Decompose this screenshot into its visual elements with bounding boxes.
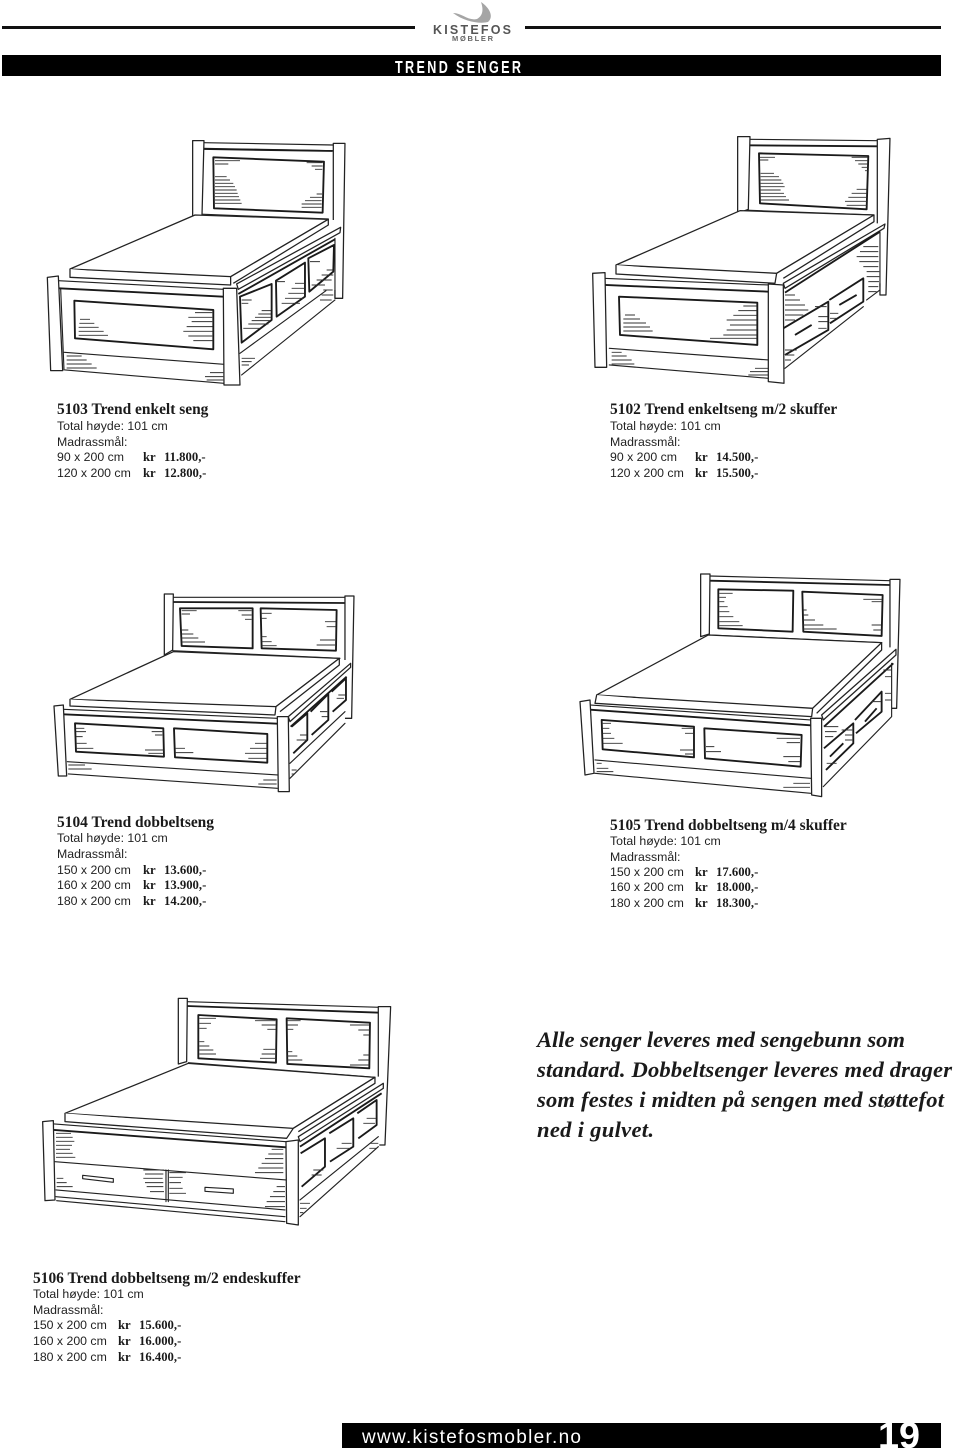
- note about bed base: Alle senger leveres med sengebunn som: [535, 1027, 905, 1052]
- footboard panels: [602, 720, 802, 767]
- text: 5102: Madrassmål:: [610, 435, 680, 449]
- footboard panels: [75, 723, 267, 763]
- mattress: [70, 652, 339, 707]
- title bar: [2, 55, 941, 76]
- bed 5102: [593, 137, 890, 383]
- text: 5106: kr: [118, 1318, 131, 1332]
- text: 5105: Madrassmål:: [610, 850, 680, 864]
- text: 5106: 160 x 200 cm: [33, 1334, 107, 1348]
- text: 5102: 15.500,-: [716, 466, 758, 480]
- text: 5106: 5106 Trend dobbeltseng m/2 endeskuffer: [33, 1270, 301, 1287]
- text: 5104: Madrassmål:: [57, 847, 127, 861]
- note about bed base: ned i gulvet.: [537, 1117, 654, 1142]
- drawers: [783, 278, 863, 355]
- side rail: [237, 227, 341, 289]
- footboard: [603, 278, 768, 378]
- text: 5105: 18.000,-: [716, 880, 758, 894]
- logo: [433, 2, 511, 43]
- text: 5104: 13.900,-: [164, 878, 206, 892]
- text: 5102: [610, 401, 837, 480]
- mattress: [70, 215, 328, 277]
- text: 5104: 13.600,-: [164, 863, 206, 877]
- mattress: [616, 211, 874, 273]
- text: 5106: Total høyde: 101 cm: [33, 1287, 144, 1301]
- text: 5105: kr: [695, 880, 708, 894]
- text: 5103: Total høyde: 101 cm: [57, 419, 168, 433]
- text: 5106: 180 x 200 cm: [33, 1350, 107, 1364]
- footboard panel: [74, 301, 213, 349]
- text: 5103: 5103 Trend enkelt seng: [57, 401, 209, 418]
- text: 5106: 15.600,-: [139, 1318, 181, 1332]
- text: 5102: 14.500,-: [716, 450, 758, 464]
- text: 5106: 16.400,-: [139, 1350, 181, 1364]
- text: 5103: 120 x 200 cm: [57, 466, 131, 480]
- text: 5103: 12.800,-: [164, 466, 206, 480]
- side rail: [288, 663, 351, 722]
- text: 5103: Madrassmål:: [57, 435, 127, 449]
- bed 5105: [580, 574, 900, 797]
- note about bed base: standard. Dobbeltsenger leveres med drager: [536, 1057, 952, 1082]
- text: 5104: 160 x 200 cm: [57, 878, 131, 892]
- text: 5102: kr: [695, 450, 708, 464]
- text: 5104: [57, 814, 214, 908]
- text: 5105: 17.600,-: [716, 865, 758, 879]
- text: 5103: kr: [143, 466, 156, 480]
- text: 5105: kr: [695, 896, 708, 910]
- text: 5104: 5104 Trend dobbeltseng: [57, 814, 214, 831]
- text: 5105: Total høyde: 101 cm: [610, 834, 721, 848]
- website: www.kistefosmobler.no: [361, 1427, 581, 1448]
- text: 5103: 90 x 200 cm: [57, 450, 124, 464]
- text: 5105: 180 x 200 cm: [610, 896, 684, 910]
- bed 5104: [54, 594, 354, 792]
- text: 5105: [610, 817, 847, 910]
- text: 5104: Total høyde: 101 cm: [57, 831, 168, 845]
- note about bed base: som festes i midten på sengen med støttefot: [536, 1087, 945, 1112]
- headboard panel: [759, 153, 868, 209]
- footer bar: [342, 1423, 941, 1448]
- note about bed base: [535, 1027, 952, 1142]
- header: [2, 2, 941, 78]
- header rule left: [2, 26, 415, 29]
- text: 5102: kr: [695, 466, 708, 480]
- text: 5103: kr: [143, 450, 156, 464]
- text: 5105: 18.300,-: [716, 896, 758, 910]
- footboard: [58, 281, 224, 383]
- text: 5104: kr: [143, 894, 156, 908]
- text: 5104: kr: [143, 863, 156, 877]
- footboard: [589, 705, 811, 793]
- text: 5106: kr: [118, 1350, 131, 1364]
- headboard panel: [213, 157, 324, 213]
- footer: [342, 1415, 941, 1450]
- text: 5104: 14.200,-: [164, 894, 206, 908]
- text: 5102: Total høyde: 101 cm: [610, 419, 721, 433]
- drawer handles: [83, 1175, 233, 1193]
- text: 5103: 11.800,-: [164, 450, 206, 464]
- mattress: [597, 635, 882, 708]
- drawers: [824, 692, 882, 770]
- text: 5104: 150 x 200 cm: [57, 863, 131, 877]
- logo subline: MØBLER: [452, 34, 494, 43]
- mattress: [65, 1063, 375, 1128]
- text: 5102: 120 x 200 cm: [610, 466, 684, 480]
- title: TREND SENGER: [395, 58, 521, 78]
- side rail: [822, 649, 896, 720]
- text: 5106: 16.000,-: [139, 1334, 181, 1348]
- side rail: [298, 1083, 383, 1142]
- icon: swoosh: [453, 2, 491, 23]
- text: 5104: 180 x 200 cm: [57, 894, 131, 908]
- headboard panels: [718, 589, 883, 636]
- text: 5103: [57, 401, 209, 480]
- footboard with end drawers: [54, 1124, 286, 1222]
- footboard: [63, 709, 277, 788]
- text: 5102: 5102 Trend enkeltseng m/2 skuffer: [610, 401, 837, 418]
- text: 5105: kr: [695, 865, 708, 879]
- text: 5105: 5105 Trend dobbeltseng m/4 skuffer: [610, 817, 847, 834]
- text: 5102: 90 x 200 cm: [610, 450, 677, 464]
- side rail: [783, 224, 885, 288]
- headboard panels: [180, 608, 337, 651]
- text: 5106: kr: [118, 1334, 131, 1348]
- logo wordmark: KISTEFOS: [433, 23, 511, 37]
- headboard panels: [198, 1015, 370, 1068]
- text: 5105: 160 x 200 cm: [610, 880, 684, 894]
- text: 5106: Madrassmål:: [33, 1303, 103, 1317]
- text: 5106: 150 x 200 cm: [33, 1318, 107, 1332]
- text: 5105: 150 x 200 cm: [610, 865, 684, 879]
- text: 5106: [33, 1270, 301, 1364]
- footboard panel: [619, 297, 757, 345]
- bed 5106: [43, 998, 391, 1225]
- bed 5103: [47, 141, 345, 385]
- header rule right: [525, 26, 941, 29]
- text: 5104: kr: [143, 878, 156, 892]
